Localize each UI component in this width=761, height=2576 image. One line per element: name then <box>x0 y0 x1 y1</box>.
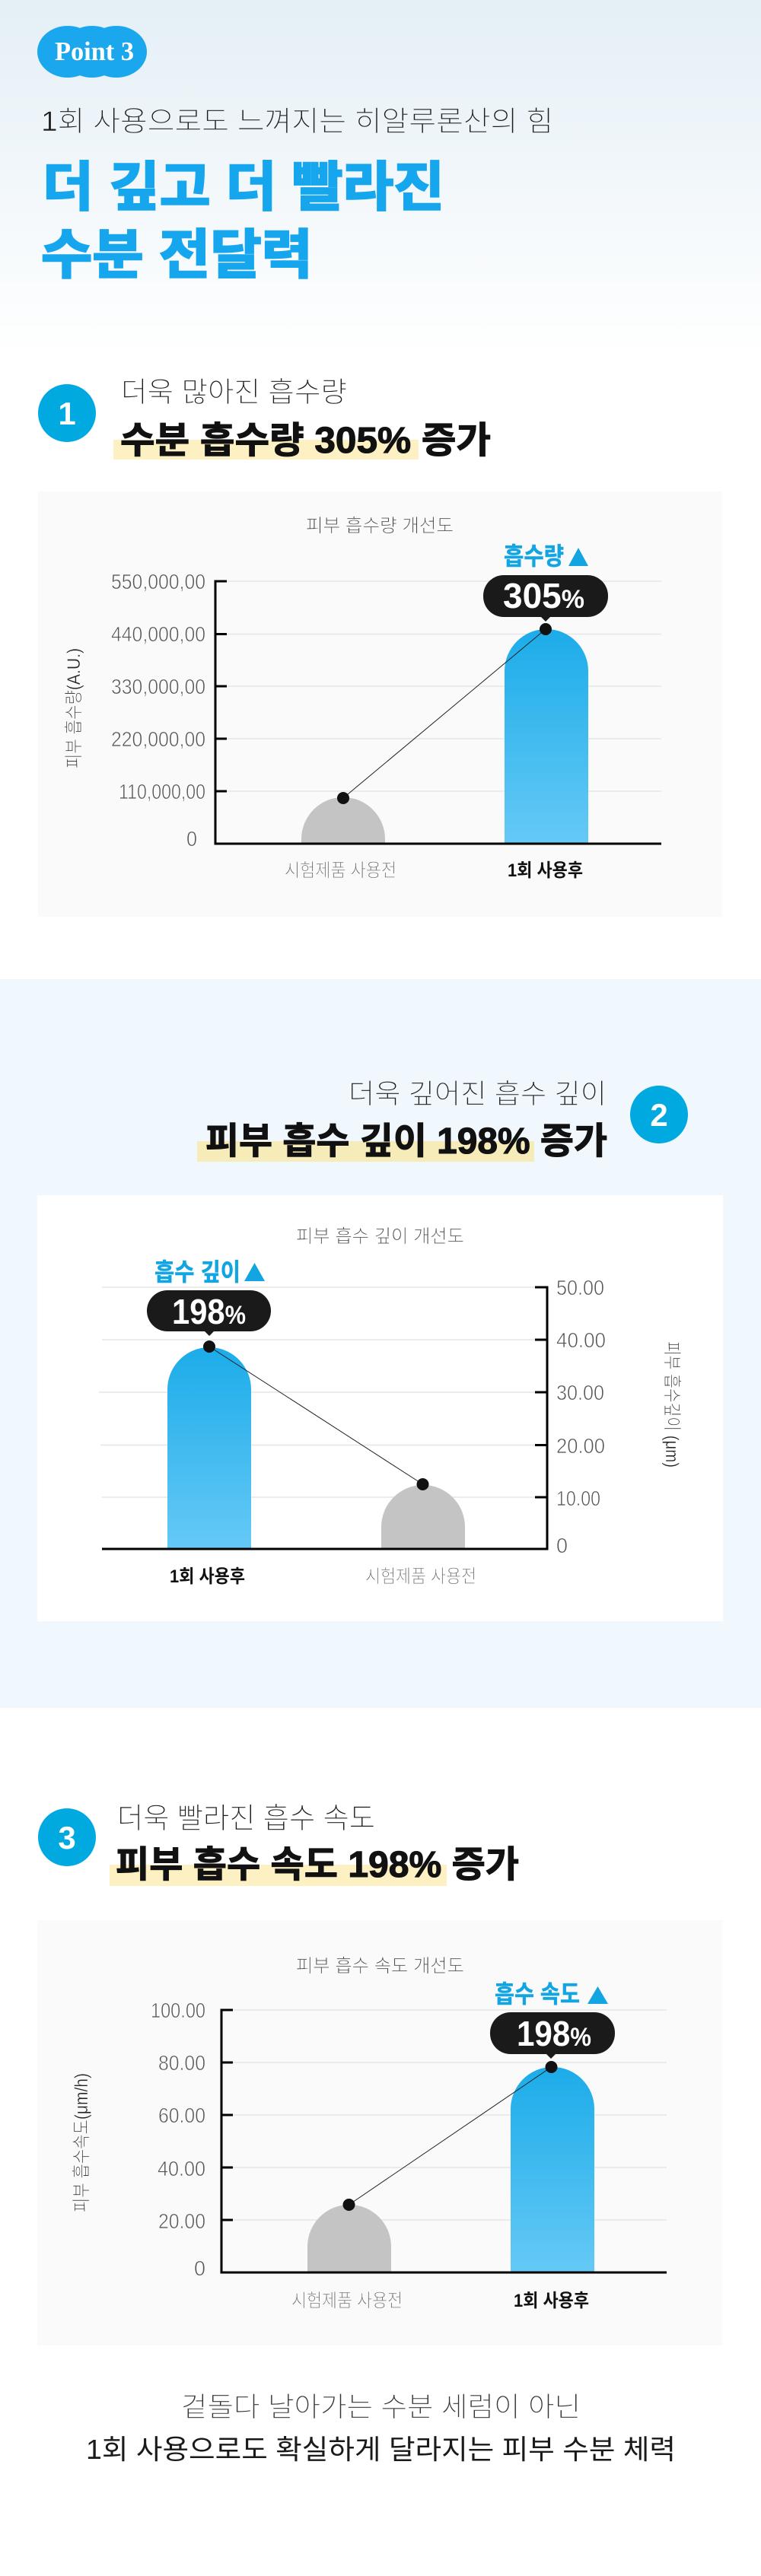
section 2 highlight <box>197 1141 534 1162</box>
callout: 198% depth: 흡수 깊이 <box>154 1258 240 1286</box>
callout: 198% speed: 흡수 속도 <box>495 1980 580 2008</box>
bar chart: 550,000,00 <box>111 570 205 593</box>
number badge 1 <box>38 384 96 442</box>
chart title: 피부 흡수 깊이 개선도 <box>296 1226 464 1247</box>
badge: Point 3 <box>37 26 147 78</box>
section 1 highlight <box>113 440 419 460</box>
bar chart: 0 <box>194 2256 205 2280</box>
section 1 headline: 수분 흡수량 305% 증가 <box>120 421 491 461</box>
bar chart <box>111 570 661 881</box>
bar chart <box>99 1276 606 1587</box>
y axis label: 피부 흡수깊이 (μm) <box>661 1341 682 1468</box>
number badge 3 <box>38 1808 96 1866</box>
badge: Point 3: Point 3 <box>55 37 134 66</box>
bar chart: 440,000,00 <box>111 622 205 646</box>
callout: 198% depth <box>147 1258 271 1336</box>
section 1 subheading: 더욱 많아진 흡수량 <box>121 377 347 408</box>
panel: absorption speed chart <box>37 1920 722 2345</box>
bar chart: 40.00 <box>158 2157 205 2180</box>
section 2 heading <box>197 1078 688 1162</box>
number badge 3: 3 <box>58 1820 76 1856</box>
header block <box>37 26 553 285</box>
number badge 1: 1 <box>58 396 76 431</box>
bar chart: 1회 사용후 <box>508 860 583 881</box>
closing text <box>86 2391 676 2465</box>
bar chart: 50.00 <box>556 1276 604 1299</box>
bar chart: 330,000,00 <box>111 675 205 698</box>
y axis label: 피부 흡수속도(μm/h) <box>72 2073 92 2212</box>
bar chart: 20.00 <box>556 1434 605 1458</box>
bar chart: 110,000,00 <box>119 780 205 803</box>
chart title: 피부 흡수량 개선도 <box>306 516 454 536</box>
callout: 305%: 흡수량 <box>504 542 564 570</box>
bar chart: 10.00 <box>556 1487 600 1510</box>
bar chart: 시험제품 사용전 <box>291 2291 403 2311</box>
callout: 305% <box>483 542 608 622</box>
section 2 headline: 피부 흡수 깊이 198% 증가 <box>205 1121 607 1162</box>
bar chart: 100.00 <box>151 1999 205 2022</box>
title: 수분 전달력 <box>41 225 313 285</box>
closing text: 겉돌다 날아가는 수분 세럼이 아닌 <box>181 2391 581 2422</box>
chart title: 피부 흡수 속도 개선도 <box>296 1956 464 1977</box>
number badge 2: 2 <box>650 1097 668 1133</box>
bar chart: 220,000,00 <box>111 727 205 751</box>
section 3 highlight <box>110 1865 447 1886</box>
bar chart: 20.00 <box>158 2209 205 2233</box>
panel: absorption depth chart <box>37 1195 723 1621</box>
subtitle: 1회 사용으로도 느껴지는 히알루론산의 힘 <box>41 106 553 137</box>
bar chart: 40.00 <box>556 1328 606 1352</box>
callout: 198% depth: 198% <box>172 1292 246 1331</box>
bar chart: 1회 사용후 <box>170 1566 245 1587</box>
callout: 305%: 305% <box>503 576 584 615</box>
bar chart <box>151 1999 667 2311</box>
title <box>41 157 444 285</box>
title: 더 깊고 더 빨라진 <box>43 157 444 217</box>
bar chart: 시험제품 사용전 <box>285 860 396 881</box>
section 2 subheading: 더욱 깊어진 흡수 깊이 <box>349 1078 607 1109</box>
section 1 heading <box>38 377 491 461</box>
bar chart: 시험제품 사용전 <box>365 1566 476 1587</box>
callout: 198% speed: 198% <box>517 2014 591 2053</box>
bar chart: 30.00 <box>556 1381 604 1404</box>
section 3 headline: 피부 흡수 속도 198% 증가 <box>116 1845 519 1885</box>
bar chart: 0 <box>556 1534 568 1557</box>
bar chart: 80.00 <box>158 2051 205 2075</box>
bar chart: 1회 사용후 <box>514 2291 589 2311</box>
number badge 2 <box>630 1086 688 1143</box>
section 3 heading <box>38 1803 519 1886</box>
bar chart: 0 <box>186 827 197 851</box>
y axis label: 피부 흡수량(A.U.) <box>64 648 84 768</box>
section 3 subheading: 더욱 빨라진 흡수 속도 <box>117 1803 375 1835</box>
bar chart: 60.00 <box>158 2104 205 2127</box>
closing text: 1회 사용으로도 확실하게 달라지는 피부 수분 체력 <box>86 2434 676 2465</box>
panel: absorption amount chart <box>38 491 722 917</box>
callout: 198% speed <box>490 1980 615 2059</box>
